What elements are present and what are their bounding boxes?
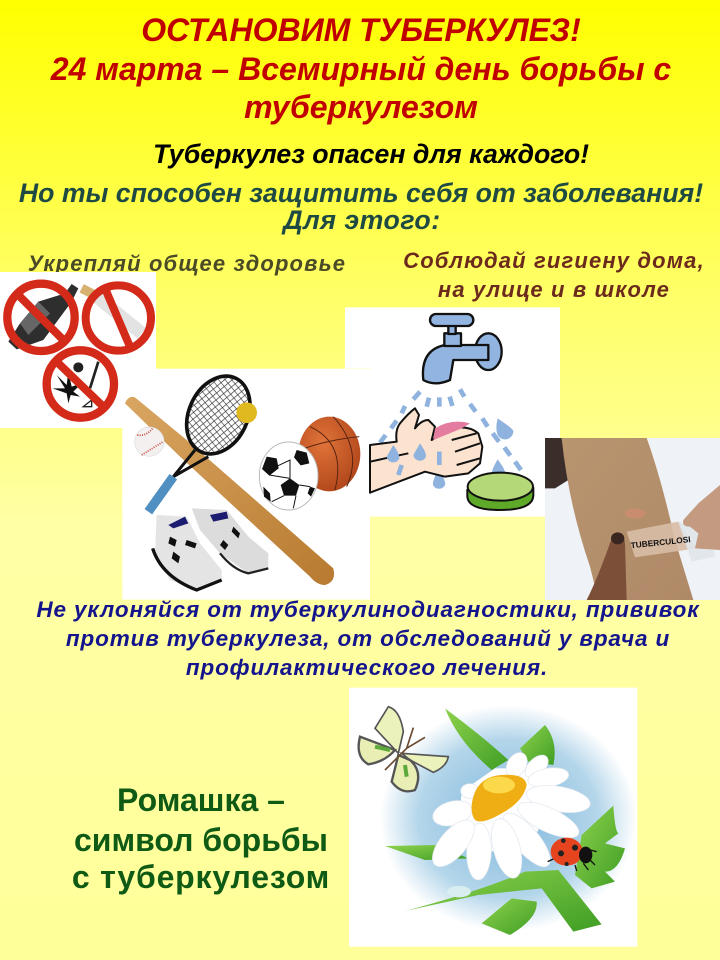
image: hand washing xyxy=(345,307,560,517)
icon: basketball xyxy=(298,417,360,491)
subtitle: protect yourself xyxy=(19,178,703,235)
icon: baseball xyxy=(135,427,164,456)
heading: hygiene xyxy=(403,248,705,302)
icon: baseball bat xyxy=(125,397,334,585)
text block: diagnostics xyxy=(36,597,700,680)
leaves xyxy=(385,708,625,935)
subtitle: protect yourself: Для этого: xyxy=(281,205,441,235)
image: daisy with butterfly and ladybug xyxy=(349,688,637,947)
water drop xyxy=(447,886,471,897)
icon: tennis racket xyxy=(148,366,262,512)
icon: hands xyxy=(370,408,482,493)
icon: hand holding ruler xyxy=(683,485,720,550)
subtitle: danger: Туберкулез опасен для каждого! xyxy=(153,139,589,169)
heading: strengthen health: Укрепляй общее здоровье xyxy=(28,251,346,276)
image: tuberculin test photo xyxy=(545,438,720,600)
water drops xyxy=(433,418,513,489)
text block: diagnostics: против туберкулеза, от обследований у врача и xyxy=(66,626,670,651)
title: 24 марта – Всемирный день борьбы с xyxy=(50,51,671,87)
title xyxy=(50,12,671,125)
text block: daisy symbol xyxy=(72,782,330,895)
icon: butterfly xyxy=(359,707,448,791)
icon: soap xyxy=(467,473,533,510)
water spray xyxy=(380,389,521,470)
text block: daisy symbol: Ромашка – xyxy=(117,782,285,818)
ruler label: TUBERCULOSI xyxy=(630,534,691,550)
icon: soccer ball xyxy=(259,442,318,510)
heading: hygiene: на улице и в школе xyxy=(438,277,670,302)
icon: finger xyxy=(587,535,627,600)
text block: diagnostics: профилактического лечения. xyxy=(186,655,548,680)
icon: ladybug xyxy=(548,838,597,871)
title: ОСТАНОВИМ ТУБЕРКУЛЕЗ! xyxy=(141,12,581,48)
subtitle: protect yourself: Но ты способен защитить себя от заболевания! xyxy=(19,178,703,208)
icon: sneakers xyxy=(153,508,268,590)
heading: hygiene: Соблюдай гигиену дома, xyxy=(403,248,705,273)
icon: daisy petals xyxy=(425,749,592,881)
image: sports equipment xyxy=(122,366,370,600)
text block: diagnostics: Не уклоняйся от туберкулинодиагностики, прививок xyxy=(36,597,700,622)
text block: daisy symbol: символ борьбы xyxy=(74,822,328,858)
daisy centre xyxy=(472,775,527,821)
text block: daisy symbol: с туберкулезом xyxy=(72,859,330,895)
title: туберкулезом xyxy=(244,89,478,125)
icon: faucet xyxy=(423,314,502,383)
image: prohibition signs xyxy=(0,272,156,428)
